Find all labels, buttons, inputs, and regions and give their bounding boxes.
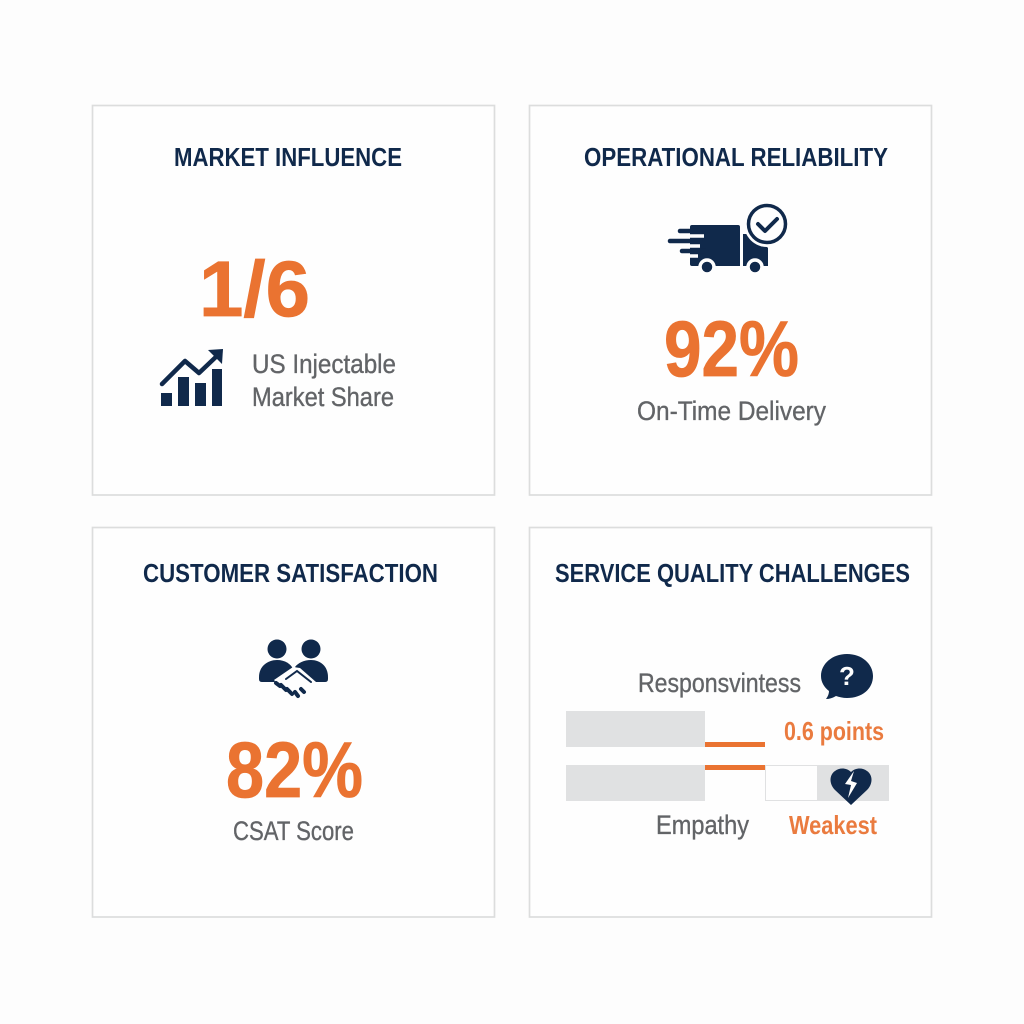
label: US Injectable Market Share: US Injectable — [252, 349, 396, 379]
icon: question speech bubble: ? — [839, 661, 855, 691]
icon: people shaking hands — [259, 640, 328, 697]
label: weakest: Weakest — [789, 810, 877, 840]
panel: service quality challenges — [530, 528, 932, 917]
gap marker: upper line — [705, 742, 765, 747]
panel: market influence — [92, 106, 494, 495]
heading: service quality challenges: SERVICE QUALITY CHALLENGES — [555, 558, 910, 588]
bar: responsiveness — [566, 711, 705, 747]
stat: 1/6: 1/6 — [199, 244, 310, 333]
label: on-time delivery: On-Time Delivery — [637, 396, 826, 426]
value: 0.6 points: 0.6 points — [784, 716, 884, 746]
icon: delivery truck with check — [670, 201, 790, 274]
label: US Injectable Market Share — [252, 349, 396, 412]
icon: rising bar chart — [161, 349, 223, 406]
label: empathy: Empathy — [656, 810, 749, 840]
heading: market influence: MARKET INFLUENCE — [174, 142, 402, 172]
stat: 82%: 82% — [226, 725, 363, 814]
icon: question speech bubble — [821, 654, 873, 699]
bar: empathy — [566, 765, 705, 801]
bar: empathy remainder — [766, 765, 889, 801]
panel: customer satisfaction — [92, 528, 494, 917]
icon: broken heart — [830, 768, 872, 805]
heading: customer satisfaction: CUSTOMER SATISFACTION — [143, 558, 438, 588]
label: CSAT score: CSAT Score — [233, 816, 354, 846]
label: responsiveness: Responsvintess — [638, 668, 801, 698]
panel: operational reliability — [530, 106, 932, 495]
gap marker: lower line — [705, 765, 765, 770]
label: US Injectable Market Share: Market Share — [252, 382, 394, 412]
heading: operational reliability: OPERATIONAL RELIABILITY — [584, 142, 888, 172]
stat: 92%: 92% — [664, 304, 799, 393]
